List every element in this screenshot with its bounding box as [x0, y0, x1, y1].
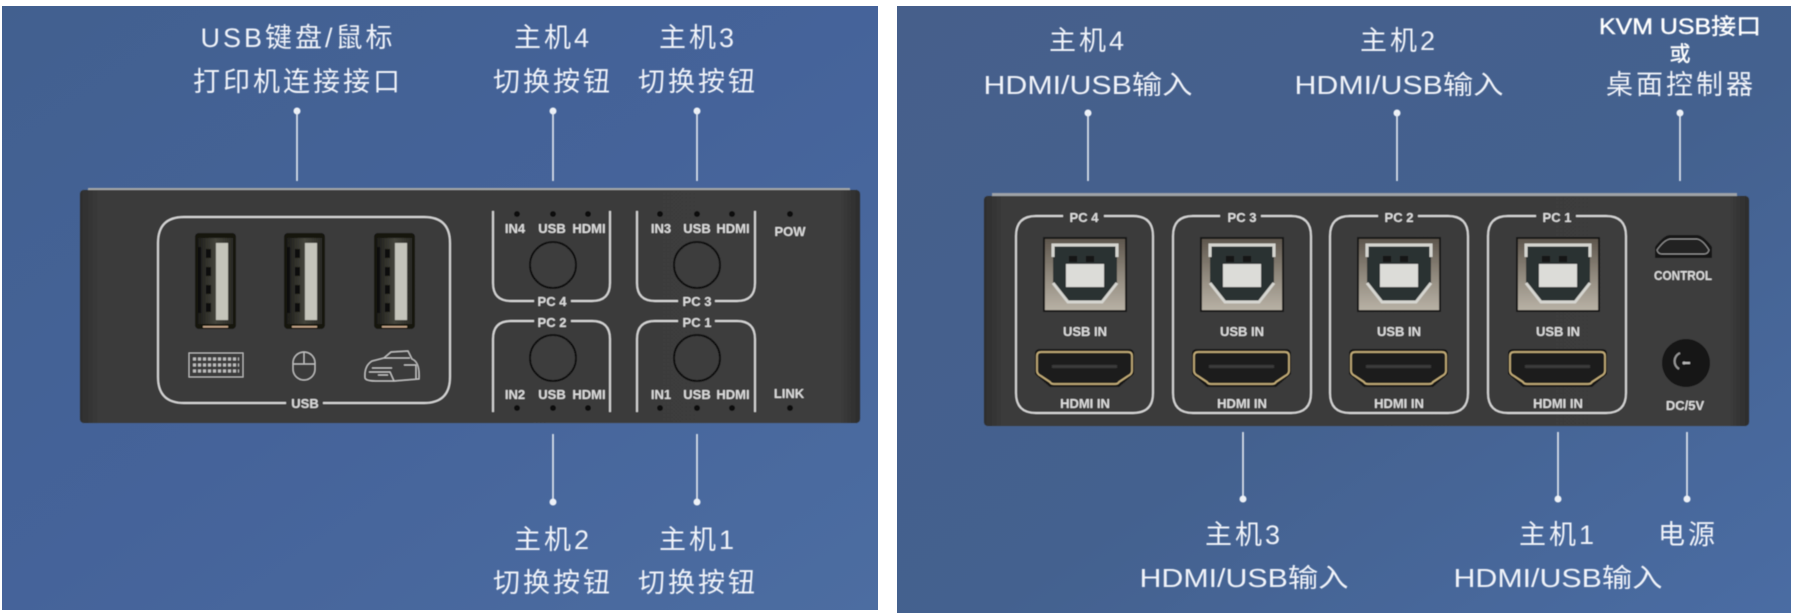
USB port: keyboard — [195, 233, 236, 329]
callout: power: 电源 — [1658, 520, 1718, 550]
port group PC 3 — [1173, 210, 1311, 413]
port group PC 3: HDMI IN — [1217, 396, 1267, 411]
button group PC 2: IN2 — [505, 387, 525, 402]
button group PC 4: HDMI — [572, 221, 606, 236]
callout: KVM USB or desktop controller: KVM USB接口 — [1599, 14, 1761, 39]
callouts: front view — [193, 23, 758, 598]
button group PC 1: USB — [683, 387, 711, 402]
port group PC 3: PC 3 — [1228, 210, 1256, 225]
button group PC 4: USB — [538, 221, 566, 236]
callout: host 1 button — [638, 434, 758, 598]
callout: host 1 button: 切换按钮 — [638, 568, 758, 598]
callout: host 4 input: HDMI/USB输入 — [984, 70, 1192, 100]
POW indicator: POW — [774, 224, 806, 239]
LINK indicator: LINK — [774, 386, 805, 401]
button group PC 1: PC 1 — [683, 315, 711, 330]
callout: host 3 input — [1140, 432, 1348, 593]
callout: KVM USB or desktop controller: 桌面控制器 — [1606, 70, 1756, 100]
micro USB control port: CONTROL — [1654, 268, 1712, 283]
DC power jack: DC/5V — [1666, 398, 1704, 413]
button group PC 3: PC 3 — [683, 294, 711, 309]
rear device — [984, 193, 1749, 426]
port group PC 2: HDMI IN — [1374, 396, 1424, 411]
panel: front view background — [2, 6, 878, 610]
port group PC 4: PC 4 — [1070, 210, 1099, 225]
port group PC 4: USB IN — [1063, 324, 1107, 339]
DC power jack — [1662, 339, 1710, 413]
button group PC 2: PC 2 — [538, 315, 566, 330]
callout: host 2 input: HDMI/USB输入 — [1294, 70, 1504, 100]
callout: host 4 button: 主机4 — [514, 23, 592, 53]
callout: host 1 input — [1454, 432, 1662, 593]
button group PC 4: PC 4 — [538, 294, 567, 309]
callout: host 4 input: 主机4 — [1049, 26, 1127, 56]
callout: host 4 button: 切换按钮 — [493, 67, 613, 97]
port group PC 3: USB IN — [1220, 324, 1264, 339]
button group PC 1: HDMI — [716, 387, 750, 402]
callout: KVM USB or desktop controller — [1599, 14, 1761, 181]
callout: host 3 input: 主机3 — [1205, 520, 1283, 550]
port group PC 2 — [1330, 210, 1468, 413]
callout: host 1 input: HDMI/USB输入 — [1454, 563, 1662, 593]
port group PC 4 — [1016, 210, 1153, 413]
button group PC 3: USB — [683, 221, 711, 236]
micro USB control port — [1654, 235, 1712, 283]
callout: host 2 button: 切换按钮 — [493, 568, 613, 598]
callout: host 2 button — [493, 434, 613, 598]
callout: host 3 input: HDMI/USB输入 — [1140, 563, 1348, 593]
callout: KVM USB or desktop controller: 或 — [1670, 43, 1690, 66]
POW indicator — [774, 211, 806, 239]
icon: keyboard — [189, 353, 243, 377]
button group PC 3: IN3 — [651, 221, 671, 236]
icon: mouse — [293, 352, 315, 380]
front device — [80, 188, 860, 423]
callout: host 2 input: 主机2 — [1360, 26, 1438, 56]
port group PC 2: PC 2 — [1385, 210, 1413, 225]
port group PC 1: USB IN — [1536, 324, 1580, 339]
USB port group: USB — [291, 396, 319, 411]
button group PC 4: IN4 — [505, 221, 526, 236]
callout: USB keyboard mouse printer — [193, 23, 403, 181]
callout: host 2 input — [1294, 26, 1504, 181]
port group PC 1: HDMI IN — [1533, 396, 1583, 411]
callout: host 1 input: 主机1 — [1519, 520, 1597, 550]
USB port: printer — [374, 233, 415, 329]
callout: USB keyboard mouse printer: USB键盘/鼠标 — [200, 23, 396, 53]
callout: host 3 button: 切换按钮 — [638, 67, 758, 97]
icon: printer — [365, 351, 419, 381]
callouts: rear view — [984, 14, 1761, 593]
button group PC 2 — [493, 315, 610, 412]
callout: host 1 button: 主机1 — [659, 525, 737, 555]
callout: host 3 button: 主机3 — [659, 23, 737, 53]
port group PC 1: PC 1 — [1543, 210, 1571, 225]
button group PC 2: USB — [538, 387, 566, 402]
port group PC 1 — [1488, 210, 1626, 413]
callout: host 2 button: 主机2 — [514, 525, 592, 555]
callout: host 3 button — [638, 23, 758, 181]
button group PC 3 — [637, 211, 755, 309]
button group PC 4 — [493, 211, 610, 309]
button group PC 1 — [637, 315, 755, 412]
callout: USB keyboard mouse printer: 打印机连接接口 — [193, 67, 403, 97]
USB port group — [158, 217, 450, 411]
callout: host 4 input — [984, 26, 1192, 181]
LINK indicator — [774, 386, 805, 411]
callout: power — [1658, 432, 1718, 550]
button group PC 2: HDMI — [572, 387, 606, 402]
callout: host 4 button — [493, 23, 613, 181]
port group PC 4: HDMI IN — [1060, 396, 1110, 411]
USB port: mouse — [284, 233, 325, 329]
button group PC 3: HDMI — [716, 221, 750, 236]
button group PC 1: IN1 — [651, 387, 671, 402]
panel: rear view background — [897, 6, 1791, 613]
port group PC 2: USB IN — [1377, 324, 1421, 339]
